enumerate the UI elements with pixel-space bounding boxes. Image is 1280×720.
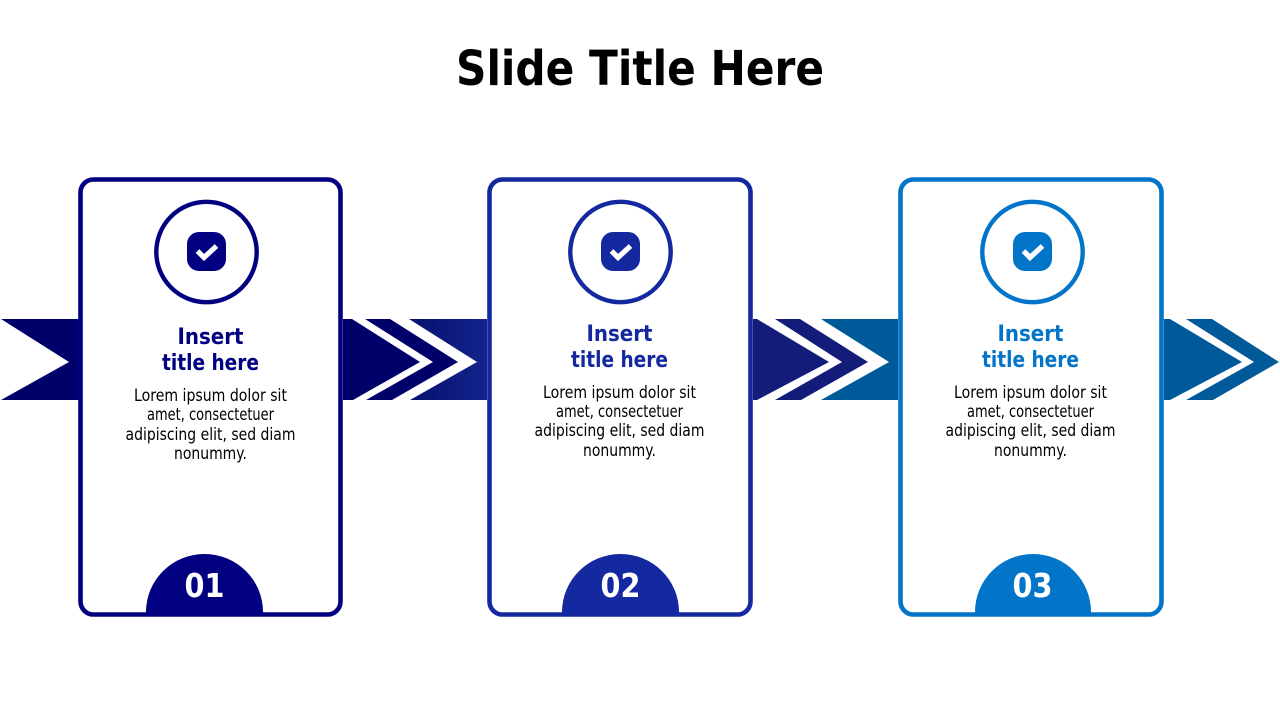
arrow: final chevrons: [1164, 319, 1279, 400]
body text: amet, consectetuer: [147, 405, 274, 424]
heading: title here: [571, 348, 668, 373]
heading: title here: [162, 351, 259, 376]
number badge: [562, 554, 679, 614]
panel: step 1: [80, 180, 340, 614]
body text: amet, consectetuer: [967, 402, 1094, 421]
body text: Lorem ipsum dolor sit: [134, 386, 287, 405]
body text: nonummy.: [174, 444, 247, 463]
panel: step 2: [490, 180, 750, 614]
icon: check badge: [570, 202, 671, 302]
number badge: 01: [184, 566, 224, 605]
icon: check badge: [156, 202, 257, 302]
body text: nonummy.: [583, 441, 656, 460]
body text: Lorem ipsum dolor sit: [954, 383, 1107, 402]
body text: nonummy.: [994, 441, 1067, 460]
heading: Insert: [586, 322, 653, 347]
heading: Insert: [178, 325, 244, 350]
number badge: 03: [1012, 566, 1052, 605]
panel: step 3: [900, 180, 1162, 614]
title: Slide Title Here: [456, 41, 824, 97]
heading: Insert: [998, 322, 1064, 347]
number badge: [975, 554, 1091, 614]
body text: adipiscing elit, sed diam: [946, 421, 1116, 440]
number badge: 02: [600, 566, 640, 605]
card frame: [900, 180, 1162, 614]
body text: Lorem ipsum dolor sit: [543, 383, 696, 402]
body text: amet, consectetuer: [556, 402, 683, 421]
card frame: [490, 180, 750, 614]
number badge: [146, 554, 263, 614]
card frame: [80, 180, 340, 614]
icon: check badge: [982, 202, 1083, 302]
arrow: chevrons between cards 1 and 2: [343, 319, 487, 400]
arrow: start notch: [1, 319, 80, 400]
arrow: chevrons between cards 2 and 3: [753, 319, 898, 400]
body text: adipiscing elit, sed diam: [126, 425, 296, 444]
heading: title here: [982, 348, 1079, 373]
body text: adipiscing elit, sed diam: [534, 421, 704, 440]
